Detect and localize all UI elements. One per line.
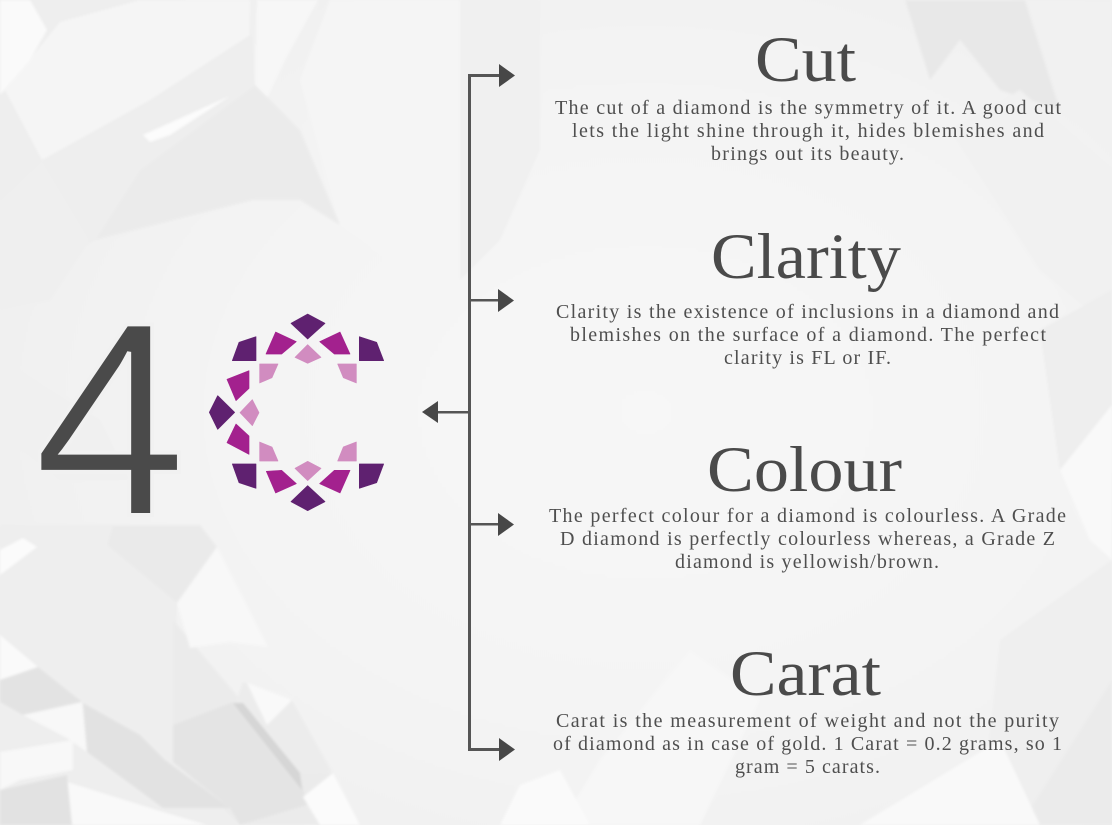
icon: faceted diamond letter C [209,314,384,511]
panel: Carat [553,638,1062,778]
text: Carat description [553,710,1062,778]
heading: Cut: Cut [755,24,856,96]
text: Colour description: D diamond is perfectly colourless whereas, a Grade Z [560,528,1055,550]
text: Carat description: Carat is the measurement of weight and not the purity [556,710,1059,732]
text: Colour description: The perfect colour for a diamond is colourless. A Grade [549,505,1066,527]
text: Clarity description: clarity is FL or IF. [724,347,891,369]
text: Clarity description [556,301,1059,369]
heading: Colour: Colour [707,434,902,506]
arrow tree connecting 4C to the four topics [422,64,515,761]
text: Carat description: gram = 5 carats. [735,756,880,778]
panel: Clarity [556,221,1059,369]
big numeral 4: 4 [33,264,187,574]
text: Colour description [549,505,1066,573]
text: Cut description: lets the light shine through it, hides blemishes and [572,120,1044,142]
text: Clarity description: blemishes on the surface of a diamond. The perfect [570,324,1046,346]
text: Carat description: of diamond as in case of gold. 1 Carat = 0.2 grams, so 1 [553,733,1062,755]
panel: Cut [555,24,1061,165]
text: Cut description [555,97,1061,165]
panel: Colour [549,434,1066,573]
heading: Carat: Carat [730,638,881,710]
text: Clarity description: Clarity is the existence of inclusions in a diamond and [556,301,1059,323]
text: Cut description: The cut of a diamond is the symmetry of it. A good cut [555,97,1061,119]
text: Cut description: brings out its beauty. [711,143,904,165]
text: Colour description: diamond is yellowish/brown. [675,551,939,573]
heading: Clarity: Clarity [711,221,902,293]
